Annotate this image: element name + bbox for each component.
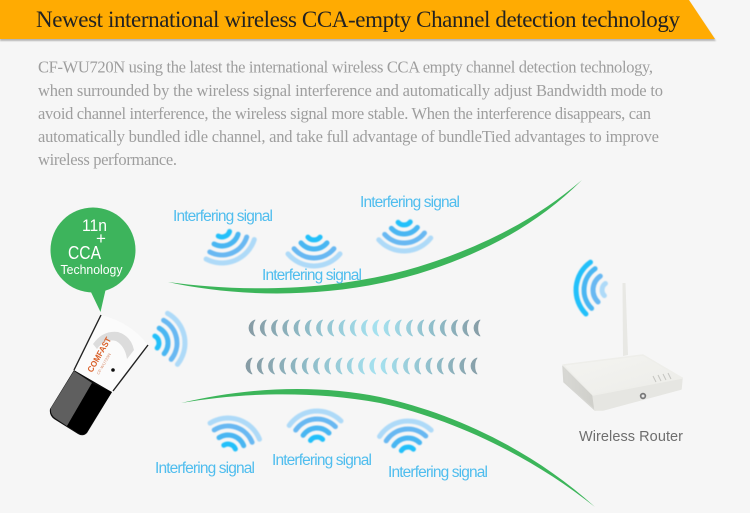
label: wireless router: Wireless Router — [579, 429, 683, 445]
callout: 11n + CCA Technology: CCA — [68, 243, 101, 263]
icon: interfering wifi bottom 3 — [378, 418, 433, 453]
paragraph: CF-WU720N using the latest the international wireless CCA empty channel detection technology, — [38, 58, 653, 76]
icon: interfering wifi top 1 — [200, 224, 259, 270]
callout: 11n + CCA Technology: + — [96, 229, 106, 248]
icon: USB wifi adapter — [50, 315, 148, 435]
bottom green curve — [181, 389, 595, 507]
label: interfering signal bottom 2: Interfering signal — [272, 452, 372, 469]
icon: USB wifi adapter: COMFAST — [85, 335, 114, 374]
label: interfering signal top 2: Interfering signal — [262, 267, 362, 284]
title: Newest international wireless CCA-empty Channel detection technology — [36, 7, 680, 32]
signal dots row 2 — [246, 358, 477, 374]
paragraph: when surrounded by the wireless signal interference and automatically adjust Bandwidth mode to — [38, 81, 663, 100]
icon: wireless router — [563, 283, 682, 410]
icon: interfering wifi top 2 — [288, 237, 340, 266]
signal dots row 1 — [249, 320, 480, 336]
paragraph: automatically bundled idle channel, and take full advantage of bundleTied advantages to improve — [38, 127, 659, 146]
paragraph: avoid channel interference, the wireless signal more stable. When the interference disappears, can — [38, 104, 651, 123]
label: interfering signal bottom 1: Interfering signal — [155, 460, 255, 477]
label: interfering signal bottom 3: Interfering signal — [388, 464, 488, 481]
icon: interfering wifi bottom 1 — [205, 412, 263, 455]
banner — [0, 0, 716, 41]
paragraph: wireless performance. — [38, 150, 177, 169]
icon: router wifi — [574, 261, 607, 315]
icon: USB wifi adapter: CF-WU720N — [96, 352, 112, 376]
label: interfering signal top 3: Interfering signal — [360, 194, 460, 211]
paragraph — [38, 58, 663, 169]
label: interfering signal top 1: Interfering signal — [173, 208, 273, 225]
callout: 11n + CCA Technology — [50, 208, 136, 312]
icon: interfering wifi top 3 — [378, 221, 431, 252]
callout: 11n + CCA Technology: 11n — [82, 216, 107, 235]
top green curve — [168, 180, 582, 293]
icon: interfering wifi bottom 2 — [288, 409, 342, 442]
icon: adapter wifi — [151, 311, 189, 368]
callout: 11n + CCA Technology: Technology — [60, 262, 123, 277]
